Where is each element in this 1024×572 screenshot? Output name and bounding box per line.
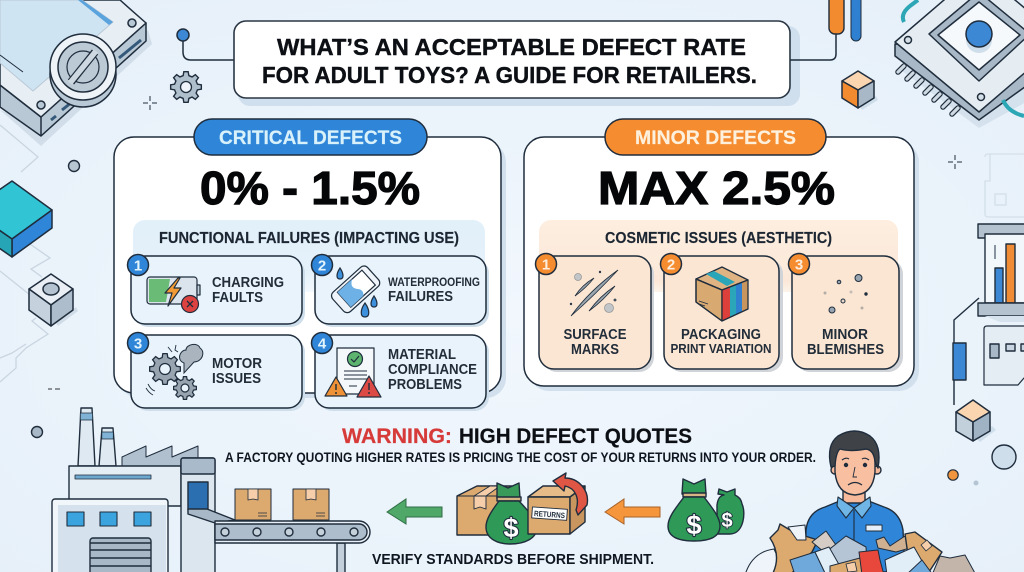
card: charging faults: FAULTS (212, 290, 263, 306)
icon: connector and tubes right of title (790, 0, 861, 60)
device illustration top left (0, 0, 152, 146)
title: FOR ADULT TOYS? A GUIDE FOR RETAILERS. (262, 62, 757, 88)
icon: dial knob (50, 34, 116, 107)
conveyor belt (215, 521, 370, 572)
card: surface marks: MARKS (571, 342, 619, 358)
card: minor blemishes: BLEMISHES (807, 342, 884, 358)
icon: money bags (668, 479, 744, 541)
card: material compliance problems: PROBLEMS (388, 377, 462, 393)
icon: teal cube (0, 181, 52, 257)
card: material compliance problems (312, 332, 489, 411)
closing advice: VERIFY STANDARDS BEFORE SHIPMENT. (372, 552, 654, 568)
icon: wet phone (329, 264, 382, 317)
badge: critical defects (194, 119, 427, 155)
sub-panel: cosmetic issues (539, 220, 898, 292)
icon: box on belt (235, 489, 271, 520)
card: packaging print variation (660, 254, 783, 372)
icon: money bags: $ (721, 510, 733, 532)
card: packaging print variation: PRINT VARIATION (670, 342, 772, 356)
returns pile (745, 549, 786, 572)
icon: smoking gears (146, 344, 203, 399)
head (843, 485, 865, 503)
illustration: factory (52, 408, 370, 572)
icon: scratches (570, 270, 618, 316)
card: packaging print variation: 2 (667, 256, 675, 274)
card: packaging print variation: PACKAGING (681, 327, 761, 343)
card: motor issues: MOTOR (212, 356, 262, 372)
card: surface marks: SURFACE (564, 327, 627, 343)
title: WHAT’S AN ACCEPTABLE DEFECT RATE (277, 34, 746, 60)
panel: minor defects (524, 119, 919, 391)
card: surface marks: 1 (542, 256, 550, 274)
panel: critical defects (114, 119, 506, 411)
illustration: machine right side (953, 224, 1024, 405)
icon: money bags: $ (686, 510, 702, 540)
card: motor issues (128, 332, 305, 411)
icon: returns box (528, 473, 587, 534)
arrow: green (387, 499, 442, 524)
card: waterproofing failures (312, 254, 489, 327)
warning text: A FACTORY QUOTING HIGHER RATES IS PRICING THE COST OF YOUR RETURNS INTO YOUR ORDER. (225, 450, 816, 465)
heading: functional failures: FUNCTIONAL FAILURES (IMPACTING USE) (159, 230, 459, 247)
icon: battery (147, 277, 200, 312)
card: minor blemishes: MINOR (822, 327, 868, 343)
icon: box with money bag (457, 483, 537, 544)
card: material compliance problems: MATERIAL (388, 347, 456, 363)
card: motor issues: 3 (134, 336, 142, 352)
icon: peach cube (956, 400, 996, 442)
heading: cosmetic issues: COSMETIC ISSUES (AESTHETIC) (605, 230, 832, 247)
icon: blemish dots (824, 274, 867, 313)
card: waterproofing failures: FAILURES (388, 289, 453, 305)
card: minor blemishes (788, 254, 903, 372)
decorative circuit traces (0, 125, 1024, 405)
icon: circuit chip top right (895, 0, 1024, 128)
icon: compliance document (325, 348, 381, 397)
icon: box on belt (293, 489, 329, 520)
icon: box with money bag: $ (503, 513, 519, 543)
card: material compliance problems: 4 (318, 336, 327, 352)
badge: critical defects: CRITICAL DEFECTS (219, 127, 402, 149)
card: motor issues: ISSUES (212, 371, 261, 387)
sub-panel: functional failures (133, 220, 485, 292)
shirt (805, 500, 905, 572)
card: waterproofing failures: WATERPROOFING (388, 277, 480, 289)
icon: orange cube (842, 71, 878, 110)
card: charging faults (128, 254, 305, 327)
card: minor blemishes: 3 (795, 256, 803, 274)
card: charging faults: CHARGING (212, 275, 284, 291)
collar (837, 497, 854, 518)
icon: gear (171, 72, 201, 102)
warning heading: HIGH DEFECT QUOTES (459, 425, 692, 448)
card: material compliance problems: COMPLIANCE (388, 362, 477, 378)
icon: grey cube (29, 274, 78, 326)
badge: minor defects (605, 119, 826, 155)
illustration: worried retailer with returns pile (745, 431, 976, 572)
warning heading: WARNING: (342, 425, 452, 448)
icon: returns box: RETURNS (534, 509, 565, 520)
badge: minor defects: MINOR DEFECTS (635, 127, 796, 149)
stat: minor maximum: MAX 2.5% (598, 162, 835, 214)
card: surface marks (536, 254, 654, 372)
arrow: orange (605, 499, 660, 524)
warning heading (342, 425, 692, 448)
card: charging faults: 1 (134, 258, 142, 274)
card: waterproofing failures: 2 (318, 258, 326, 274)
icon: printed box (696, 267, 748, 321)
title (234, 21, 800, 106)
icon: connector left of title (177, 29, 234, 60)
stat: critical range: 0% - 1.5% (200, 162, 420, 214)
